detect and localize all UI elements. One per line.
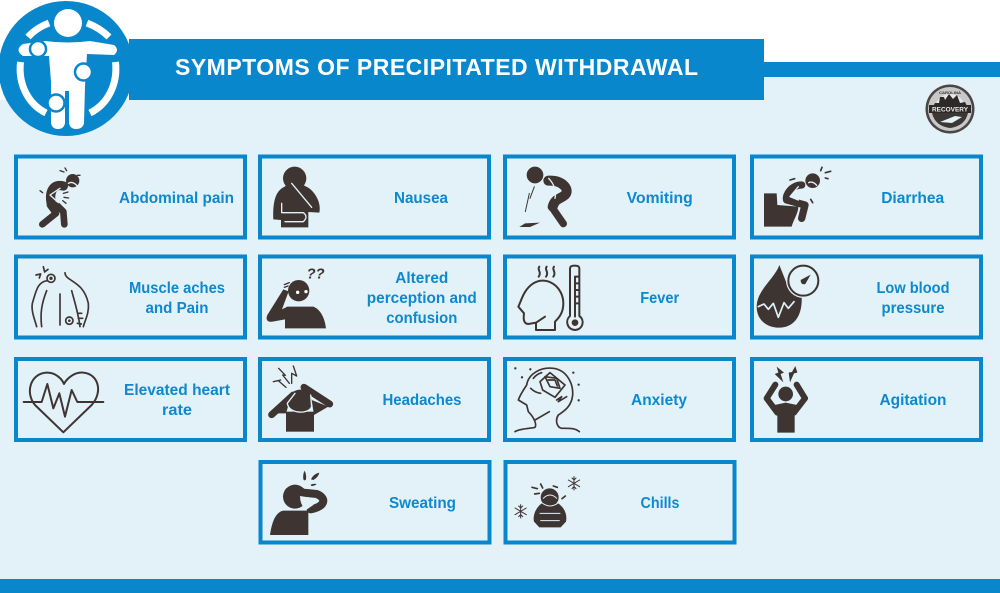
label: Headaches	[382, 392, 462, 409]
right header band	[764, 62, 1000, 77]
icon: fever head and thermometer	[518, 266, 583, 330]
panel: Elevated heart rate: rate	[162, 402, 192, 419]
logo: Carolina Recovery badge: RECOVERY	[932, 108, 968, 114]
label: Diarrhea	[881, 190, 945, 207]
logo: Carolina Recovery badge: CAROLINA	[939, 90, 961, 95]
panel: Sweating	[260, 462, 490, 542]
panel: Abdominal pain	[16, 156, 245, 238]
panel: Diarrhea	[752, 156, 981, 238]
icon: vomiting	[519, 167, 567, 227]
label: Abdominal pain	[119, 190, 234, 207]
title banner	[129, 39, 764, 100]
panel: Chills	[506, 462, 734, 542]
label: Chills	[640, 495, 680, 512]
label: Altered	[395, 270, 448, 287]
panel: Agitation	[752, 359, 981, 440]
panel: Muscle aches and Pain	[16, 256, 245, 338]
icon: confused person	[267, 267, 326, 328]
icon: nausea	[273, 167, 320, 227]
label: Fever	[640, 290, 679, 307]
panel: Headaches	[260, 359, 489, 440]
label: Low blood	[876, 280, 950, 297]
label: Nausea	[394, 190, 448, 207]
panel: Elevated heart rate	[16, 359, 245, 440]
icon: person holding head	[272, 366, 330, 432]
icon: agitated person	[767, 366, 805, 433]
bottom band	[0, 579, 1000, 593]
icon: heart with ECG	[24, 373, 103, 432]
icon: confused person: ??	[307, 267, 325, 283]
panel: Anxiety	[505, 359, 734, 440]
logo: Carolina Recovery badge	[926, 84, 974, 134]
panel: Low blood pressure: pressure	[882, 300, 945, 317]
label: Vomiting	[627, 190, 693, 207]
label: Muscle aches	[129, 280, 225, 297]
panel: Altered perception and confusion: perception and	[367, 290, 477, 307]
panel: Altered perception and confusion	[260, 256, 489, 338]
label: Elevated heart	[124, 382, 230, 399]
icon: shivering person with snowflakes	[515, 477, 580, 527]
panel: Altered perception and confusion: confusion	[386, 310, 457, 327]
panel: Vomiting	[505, 156, 734, 238]
label: Anxiety	[631, 392, 687, 409]
icon: anxious head with tangled thoughts	[514, 367, 580, 432]
icon: blood drop and gauge	[757, 263, 821, 328]
icon: abdominal pain	[40, 168, 80, 224]
panel: Muscle aches and Pain: and Pain	[146, 300, 208, 317]
icon: body with pain points	[0, 1, 134, 136]
icon: muscle aches	[32, 267, 88, 327]
icon: diarrhea	[764, 167, 831, 227]
icon: person wiping sweat	[270, 471, 323, 535]
label: Agitation	[880, 392, 946, 409]
panel: Fever	[505, 256, 734, 338]
title: SYMPTOMS OF PRECIPITATED WITHDRAWAL	[175, 54, 698, 80]
panel: Nausea	[260, 156, 489, 238]
panel: Low blood pressure	[752, 256, 981, 338]
label: Sweating	[389, 495, 456, 512]
